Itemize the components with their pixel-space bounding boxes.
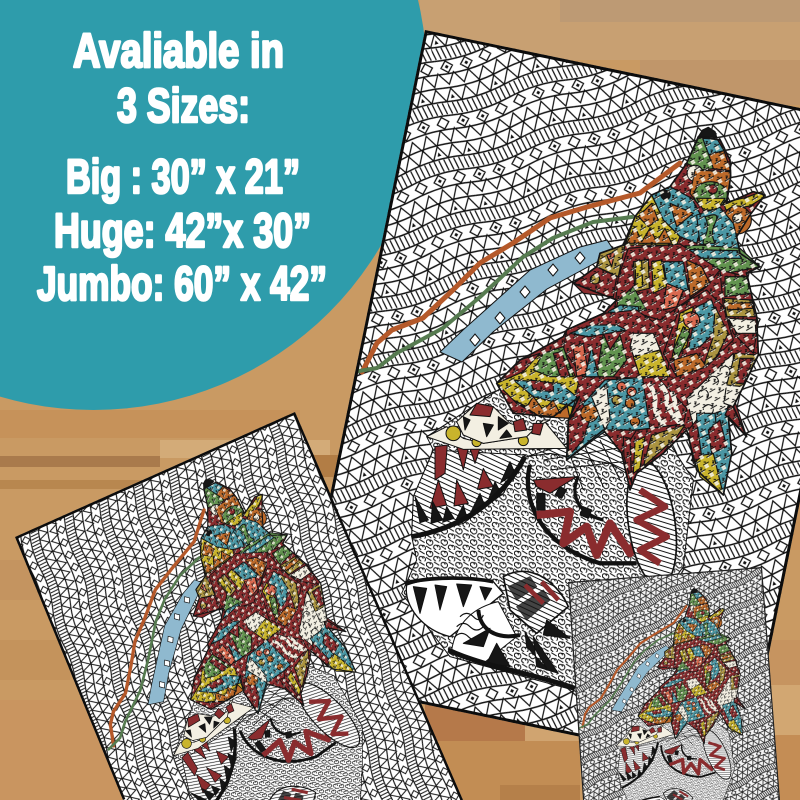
- heading and size list: [37, 25, 327, 311]
- teal circle badge: [0, 0, 427, 410]
- poster: huge wolf colouring page: [14, 412, 463, 800]
- size: huge: Huge: 42”x 30”: [54, 205, 311, 258]
- heading: 3 sizes: 3 Sizes:: [117, 80, 250, 133]
- size: big: Big : 30” x 21”: [66, 151, 300, 204]
- size: jumbo: Jumbo: 60” x 42”: [37, 258, 327, 311]
- heading: available in: Avaliable in: [73, 25, 284, 78]
- poster: jumbo wolf colouring page: [330, 30, 800, 736]
- poster: big wolf colouring page: [550, 567, 783, 800]
